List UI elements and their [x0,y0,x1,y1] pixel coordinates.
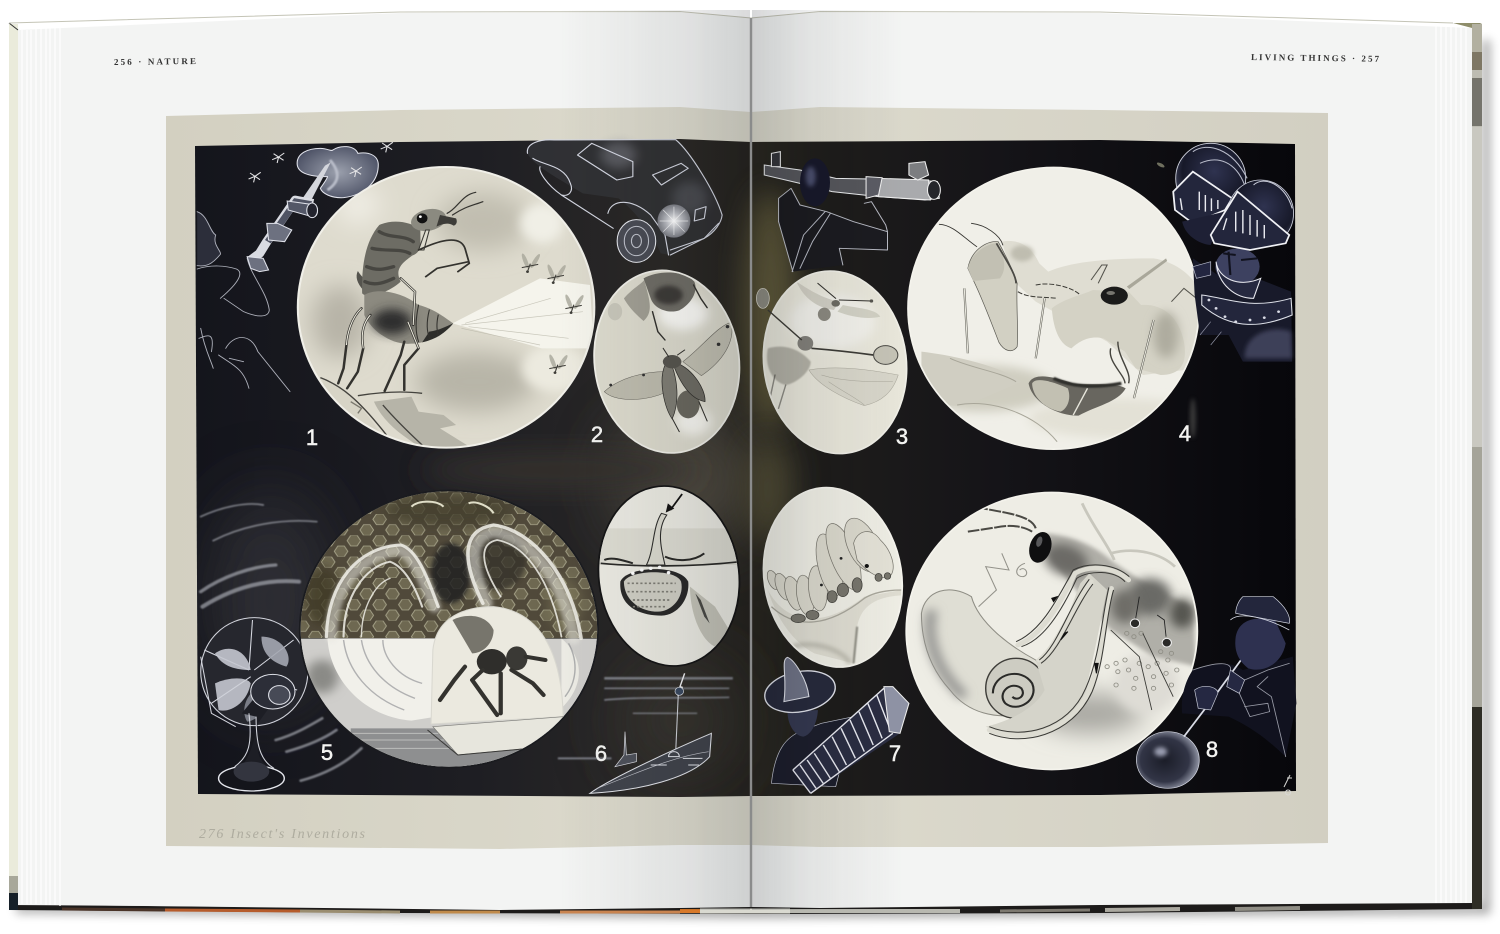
icon: submarine with periscope [558,673,733,793]
panel numbers: 5 [321,740,333,765]
illustration group: bottom right [750,478,1296,793]
panel numbers: 3 [896,424,908,449]
illustration group: bottom left [201,479,750,793]
icon: man with bazooka [764,152,940,272]
panel numbers: 4 [1179,421,1191,446]
circle 5: beehive air conditioning [297,487,604,772]
icon: electric fan [201,618,308,791]
plate: cream backing sheet [166,107,1328,849]
book bottom edge [9,901,1482,914]
caterpillar segments [766,518,874,615]
left page stack lines [22,27,60,906]
spray cone [452,278,594,348]
icon: gun-wielding figure [197,200,317,392]
glass dome with bee [431,607,563,724]
artist monogram [1284,775,1292,795]
circle 1: beetle spraying [297,166,595,449]
coiled tube [921,590,1044,716]
ant 2 body [1052,290,1185,375]
oval 6: mosquito larva with breathing tube [598,485,740,667]
ant 1 body [1002,241,1200,375]
panel numbers: 6 [595,741,607,766]
handwritten caption: 276 Insect's Inventions [199,827,366,842]
illustration group: top right [753,143,1294,461]
air current swirls [331,532,574,638]
panel numbers: 1 [306,425,318,450]
oval 3: wasps [756,270,908,454]
right page stack lines [1436,24,1466,903]
spiracle dots [1105,631,1179,690]
flying insects [522,254,540,273]
seed in mandibles [1029,376,1126,416]
page edge strip: left [9,23,18,910]
oval 7: caterpillar [762,486,904,668]
icon: smoke cloud with gun spray [249,142,393,203]
icon: wind arcs [201,504,361,781]
right page [751,12,1472,908]
panel numbers: 7 [889,741,901,766]
oval 2: flying beetle [593,270,740,454]
page top edge line [9,12,1453,23]
panel numbers [306,421,1218,766]
running head: right page: LIVING THINGS · 257 [1251,52,1380,64]
illustration group: top left [197,140,750,461]
beetle [357,271,372,290]
icon: boy blowing glass bulb [1136,597,1296,788]
icon: car with headlight [527,140,722,262]
trachea branches [986,573,1107,734]
icon: man with sombrero and accordion [761,657,909,793]
running head: left page: 256 · NATURE [114,56,196,67]
left page [18,12,751,910]
icon: two knights in helmets [1156,143,1294,438]
dark panel: right page [751,140,1296,796]
page edge strip: right [1453,23,1482,909]
gutter shading [560,10,902,910]
panel numbers: 2 [591,422,603,447]
leaf [324,385,379,432]
lower half [297,639,604,772]
knight armour body [1193,258,1292,362]
circle 8: insect sound organ [905,492,1198,770]
panel tone blobs [210,190,796,780]
circle 4: ants [907,167,1214,450]
dark panel: left page [195,139,751,797]
hairy body [1046,533,1196,667]
panel numbers: 8 [1206,737,1218,762]
